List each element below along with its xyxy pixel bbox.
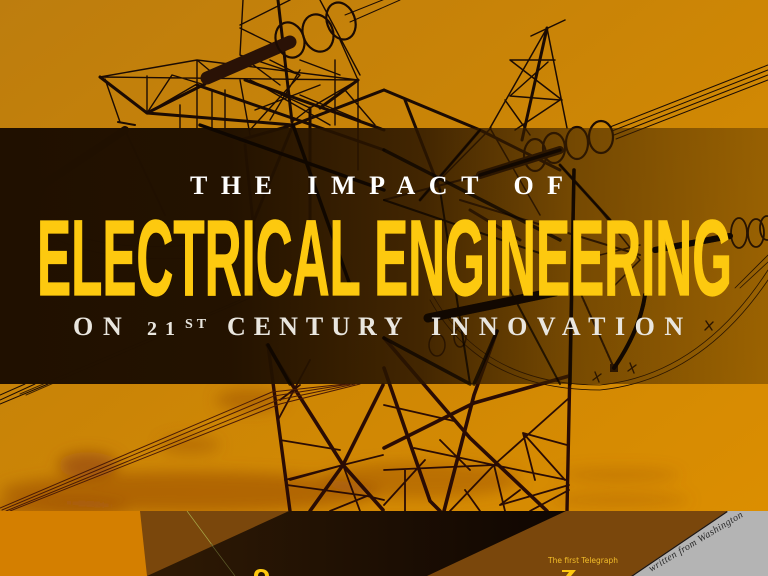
left lower wires <box>0 384 360 511</box>
title block <box>37 171 732 341</box>
title line 3: ON <box>73 312 132 341</box>
dark title band <box>0 128 768 384</box>
upper insulator <box>207 42 290 78</box>
title line 3: CENTURY <box>227 312 411 341</box>
title line 3: INNOVATION <box>431 312 693 341</box>
tower lattice <box>278 360 569 511</box>
title line 1: THE IMPACT OF <box>190 171 577 200</box>
bottom panel: brown polygon <box>140 511 768 576</box>
thin wire line <box>187 511 235 576</box>
right peak <box>420 20 567 215</box>
title line 3: 21 <box>147 318 183 340</box>
upper left arm <box>100 0 375 170</box>
telegraph label: The first Telegraph <box>547 556 618 565</box>
yellow number fragment <box>562 570 576 576</box>
bottom panel: dark parallelogram <box>147 511 566 576</box>
clouds <box>0 389 690 518</box>
tower legs <box>268 170 574 511</box>
lower left insulator and rings <box>40 130 125 187</box>
title line 3: ST <box>185 317 210 332</box>
hanging wires <box>10 205 768 390</box>
right rings <box>524 121 613 171</box>
right lower arm <box>580 210 640 290</box>
bottom panel: orange block <box>0 511 150 576</box>
central arm <box>384 90 610 240</box>
tower shown through band <box>200 125 730 384</box>
lower insulator chain <box>614 295 645 368</box>
yellow icon fragment <box>254 569 269 576</box>
right wires <box>610 65 768 139</box>
thin wire over dark <box>211 544 235 576</box>
telegraph photo <box>631 510 768 576</box>
top rings <box>271 0 361 62</box>
handwriting: written from Washington <box>647 510 745 575</box>
